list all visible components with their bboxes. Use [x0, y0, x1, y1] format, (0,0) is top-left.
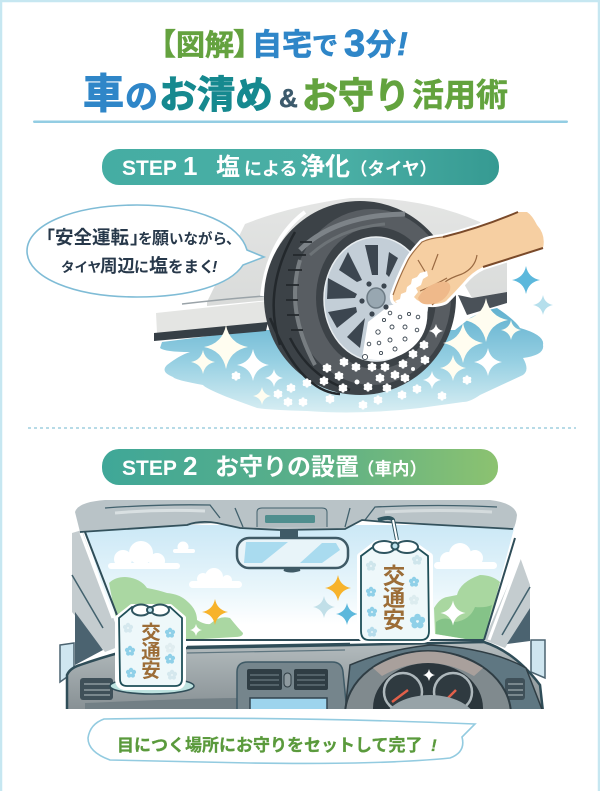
right pillar — [484, 557, 530, 648]
bubble text: 「 — [37, 228, 55, 248]
center console — [237, 662, 347, 714]
section divider — [28, 427, 576, 429]
caption text: 目につく場所にお守りをセットして完了 — [117, 736, 422, 755]
bubble text: に — [134, 259, 149, 276]
step 1 heading: 塩 — [216, 154, 240, 181]
left pillar trim — [72, 575, 103, 628]
title line 1: 3 — [344, 23, 365, 65]
overhead console — [257, 508, 327, 527]
title — [83, 23, 508, 117]
console screen — [249, 697, 328, 709]
left air vent — [80, 678, 113, 700]
left omamori — [118, 604, 183, 687]
steering hub — [390, 695, 470, 709]
trees left — [109, 577, 243, 640]
roof and sun visors — [75, 500, 517, 532]
salt on rim — [362, 311, 420, 360]
title line 2: お守り — [302, 75, 410, 116]
windshield frame lines — [85, 532, 515, 640]
title line 2: 車 — [83, 71, 124, 117]
left side window — [75, 612, 103, 665]
windshield — [83, 525, 515, 642]
bubble text: ! — [212, 259, 218, 276]
step 2 heading — [102, 449, 498, 485]
step 1 heading: STEP — [122, 157, 177, 180]
title line 1: 分 — [366, 29, 396, 62]
hanging cord — [378, 518, 397, 540]
sparkles — [191, 298, 521, 405]
bubble text: 、 — [226, 232, 240, 248]
title line 1: 自宅 — [252, 29, 312, 62]
step 1 heading: （タイヤ） — [350, 159, 437, 179]
left pillar — [72, 530, 123, 652]
step 1 heading: による — [244, 159, 297, 179]
hand — [393, 212, 544, 308]
title line 1: 】 — [233, 29, 263, 62]
step 1 heading — [102, 149, 499, 185]
left omamori knot — [132, 604, 169, 616]
hand finger lines — [418, 254, 477, 305]
title line 1: 図解 — [176, 29, 234, 62]
bubble text: を — [138, 231, 152, 248]
title line 1: で — [312, 31, 338, 61]
caption bubble — [88, 718, 475, 763]
left omamori stand — [110, 678, 194, 694]
title line 2: の — [125, 78, 158, 115]
step 2 heading: （車内） — [357, 459, 427, 479]
bubble text: をまく — [168, 258, 215, 276]
right omamori label: 安 — [383, 608, 405, 633]
white sparkles — [237, 324, 502, 389]
clouds — [108, 541, 497, 588]
bumper shadow strip — [154, 322, 268, 341]
bubble text: 願 — [152, 229, 169, 248]
tire — [264, 201, 456, 395]
car body — [207, 198, 507, 306]
bubble text: いながら — [169, 230, 227, 248]
wheel rim — [324, 237, 428, 361]
bubble text: 」 — [130, 228, 148, 248]
step 2 heading: お守りの設置 — [215, 454, 359, 481]
caption text: ! — [431, 736, 437, 755]
right omamori — [360, 518, 430, 640]
windshield sparkles — [190, 575, 466, 636]
steering wheel — [344, 644, 542, 709]
right omamori label: 通 — [383, 586, 406, 611]
left omamori label: 交 — [141, 622, 161, 644]
pinched salt — [395, 271, 428, 308]
car bumper — [156, 301, 268, 333]
rear bumper — [458, 292, 507, 315]
step 1 heading: 浄化 — [300, 153, 350, 181]
left omamori label: 安 — [141, 660, 161, 682]
splash background — [160, 308, 543, 412]
step 2 heading: 2 — [183, 451, 197, 481]
step 1 heading: 1 — [183, 151, 197, 181]
illustration: car interior — [59, 500, 546, 709]
right pillar trim — [502, 587, 530, 635]
speech bubble — [27, 205, 264, 297]
title line 2: お清め — [159, 75, 273, 117]
right omamori knot — [373, 541, 418, 553]
left omamori flowers — [123, 623, 177, 680]
left omamori label: 通 — [141, 641, 161, 663]
bubble text: タイヤ — [61, 260, 101, 275]
right side window — [507, 608, 530, 644]
title line 2: & — [279, 83, 298, 113]
title line 2: 活用術 — [412, 77, 508, 113]
bubble text: 塩 — [149, 255, 168, 277]
wheel arch — [262, 212, 305, 296]
blue sparkles — [512, 266, 553, 315]
right air vent — [505, 678, 525, 700]
salt granules — [232, 340, 471, 410]
rear-view mirror — [237, 529, 348, 572]
title rule — [33, 120, 568, 123]
dashboard — [66, 640, 544, 709]
illustration: tire and salt — [154, 198, 553, 412]
frame white band — [81, 533, 520, 640]
title line 1: ! — [397, 26, 408, 62]
body crease line — [182, 296, 265, 304]
bubble text: 安全運転 — [55, 227, 130, 248]
right omamori flowers — [366, 555, 425, 637]
side mirrors — [60, 640, 545, 682]
bubble text: 周辺 — [100, 256, 135, 276]
title line 1: 【 — [146, 29, 176, 62]
step 2 heading: STEP — [122, 457, 177, 480]
gauges — [384, 669, 472, 711]
trees right — [434, 575, 500, 642]
right omamori label: 交 — [383, 564, 405, 589]
